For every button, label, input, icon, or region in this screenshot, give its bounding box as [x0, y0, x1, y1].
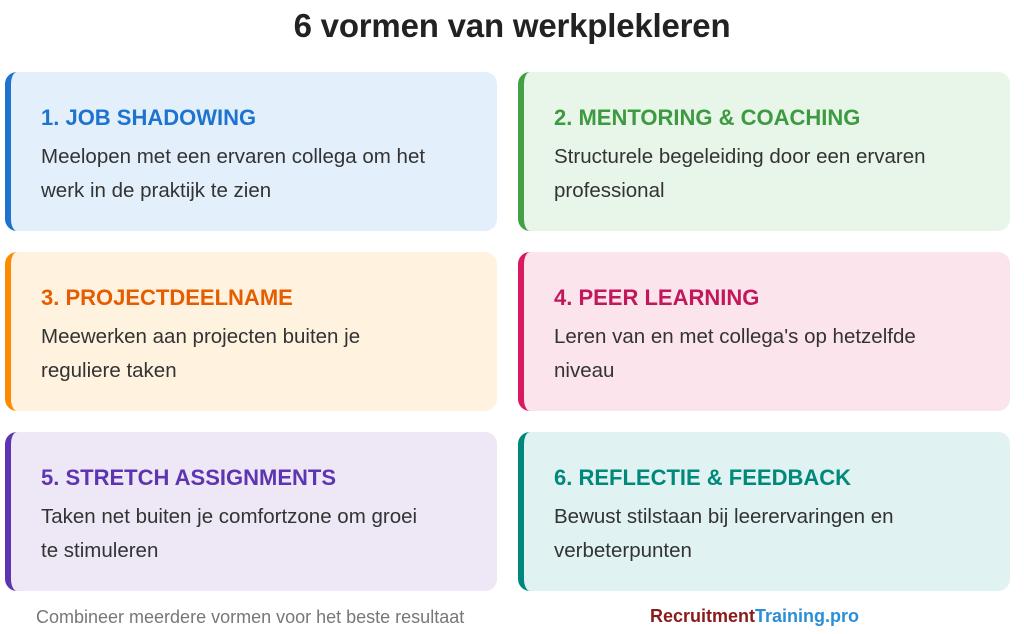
panel: stretch assignments [5, 432, 497, 591]
panel: projectdeelname: 3. PROJECTDEELNAME [41, 285, 293, 310]
panel: reflectie [518, 432, 1010, 591]
panel: projectdeelname [5, 252, 497, 411]
panel: reflectie: 6. REFLECTIE & FEEDBACK [554, 465, 851, 490]
title: 6 vormen van werkplekleren [294, 7, 730, 44]
panel: peer learning [518, 252, 1010, 411]
panel: peer learning: Leren van en met collega's op hetzelfde niveau [554, 325, 916, 382]
panel: reflectie: Bewust stilstaan bij leerervaringen en verbeterpunten [554, 505, 894, 562]
logo: RecruitmentTraining.pro [650, 606, 859, 626]
panel: stretch assignments: 5. STRETCH ASSIGNMENTS [41, 465, 336, 490]
panel: mentoring [518, 72, 1010, 231]
panel: job shadowing: Meelopen met een ervaren collega om het werk in de praktijk te zien [41, 145, 425, 202]
panel: mentoring: 2. MENTORING & COACHING [554, 105, 860, 130]
panel: job shadowing: 1. JOB SHADOWING [41, 105, 256, 130]
panel: projectdeelname: Meewerken aan projecten buiten je reguliere taken [41, 325, 360, 382]
panel: job shadowing [5, 72, 497, 231]
footer note: Combineer meerdere vormen voor het beste resultaat [36, 607, 464, 627]
panel: stretch assignments: Taken net buiten je comfortzone om groei te stimuleren [41, 505, 417, 562]
panel: mentoring: Structurele begeleiding door een ervaren professional [554, 145, 926, 202]
panel: peer learning: 4. PEER LEARNING [554, 285, 759, 310]
